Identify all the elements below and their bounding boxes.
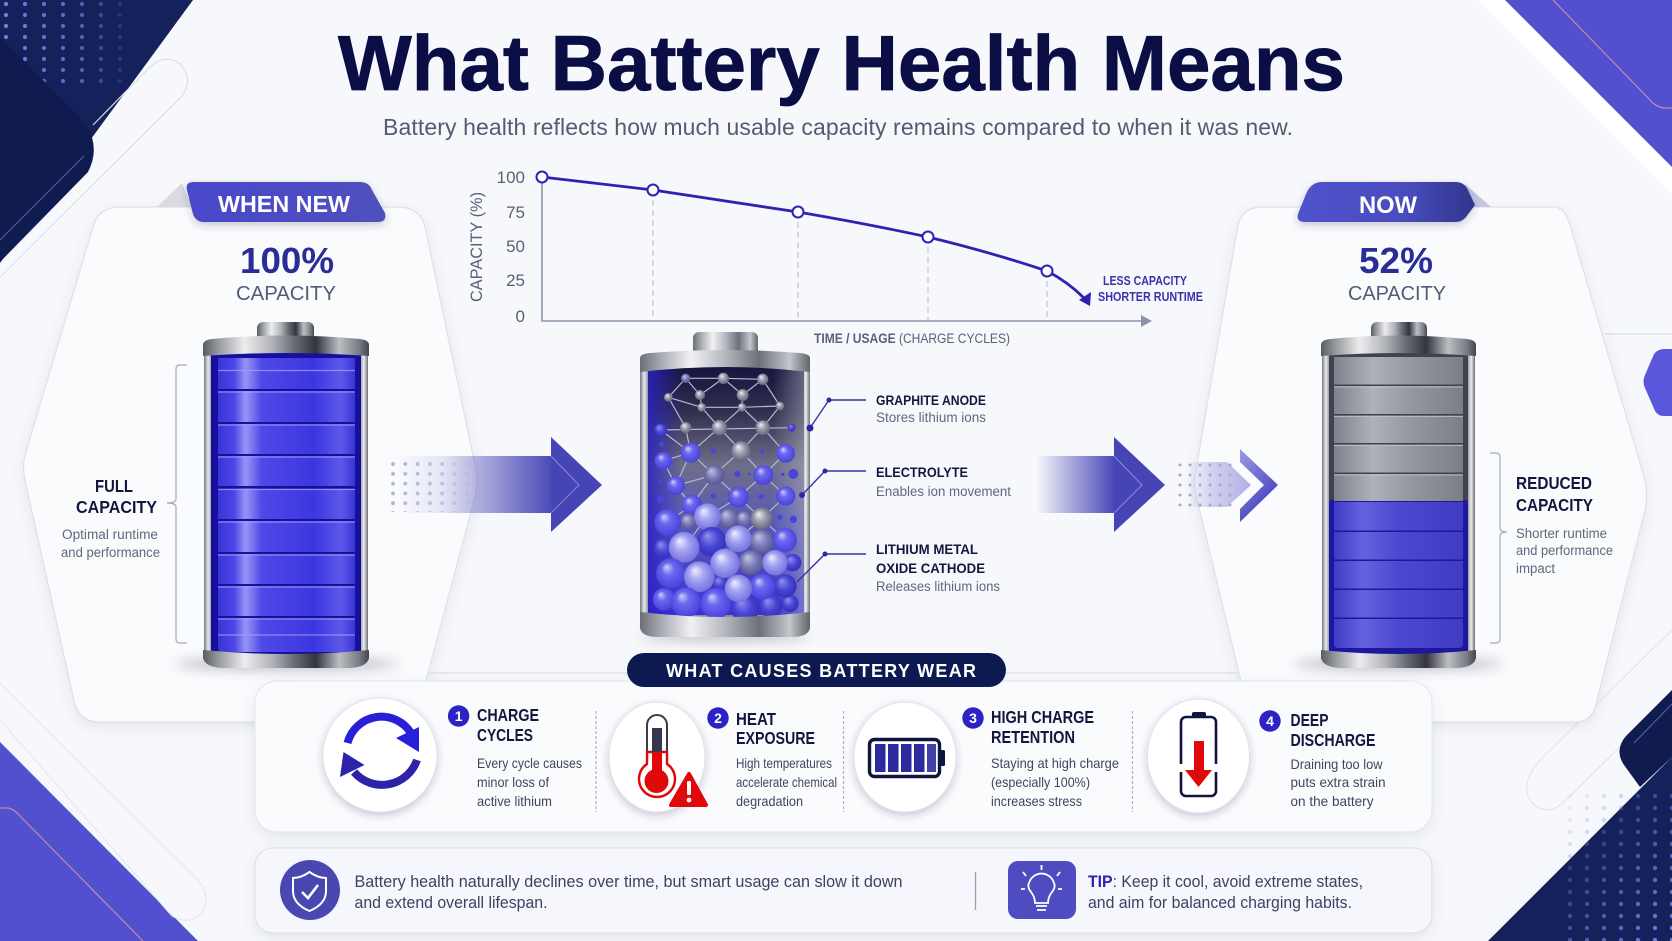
axis title: time: TIME / USAGE (CHARGE CYCLES) <box>814 331 1010 346</box>
cause 1: charge cycles <box>323 698 582 812</box>
decoration: bottom left corner <box>0 683 206 941</box>
callout: electrolyte <box>799 465 1011 499</box>
text: high charge retention: RETENTION <box>991 727 1075 747</box>
callout: graphite anode <box>806 393 986 432</box>
axis labels: y values: 25 <box>506 271 525 290</box>
chart annotation: LESS CAPACITY <box>1103 274 1188 288</box>
label: reduced capacity: REDUCED <box>1516 473 1592 493</box>
heading pill: what causes battery wear <box>627 653 1006 687</box>
label: full capacity: CAPACITY <box>76 497 157 517</box>
text: takeaway: Battery health naturally declines over time, but smart usage can slow it down <box>354 873 902 891</box>
tab: when new <box>187 182 385 222</box>
badge: 2 <box>707 707 729 729</box>
chevrons <box>1176 449 1278 522</box>
value: 100% capacity <box>236 240 336 305</box>
panel: when new <box>24 182 477 722</box>
callout: electrolyte: Enables ion movement <box>876 484 1011 499</box>
battery: full <box>174 322 398 670</box>
text: charge cycles: Every cycle causes <box>477 755 582 771</box>
value: 52% capacity <box>1348 240 1446 305</box>
badge: 4: 4 <box>1266 713 1274 729</box>
icon: full battery <box>854 702 956 812</box>
badge: 1: 1 <box>455 708 463 724</box>
icon: shield <box>280 860 340 920</box>
text: takeaway <box>354 873 902 912</box>
text: heat exposure: EXPOSURE <box>736 728 815 748</box>
text: high charge retention <box>991 707 1119 809</box>
cause 3: high charge retention <box>854 702 1119 812</box>
line chart: capacity over time <box>467 168 1203 346</box>
icon: draining battery <box>1148 699 1250 813</box>
label: full capacity: and performance <box>61 545 160 560</box>
line behind causes panel <box>428 672 1239 674</box>
label: reduced capacity: and performance <box>1516 543 1613 558</box>
text: heat exposure: accelerate chemical <box>736 774 837 790</box>
text: high charge retention: increases stress <box>991 793 1082 809</box>
text: deep discharge: puts extra strain <box>1290 774 1386 790</box>
axis labels: y values: 100 <box>497 168 525 187</box>
badge: 3: 3 <box>969 710 977 726</box>
decoration: top right corner <box>1478 0 1672 195</box>
axis title: capacity: CAPACITY (%) <box>467 192 486 302</box>
text: high charge retention: (especially 100%) <box>991 774 1090 790</box>
text: heat exposure: High temperatures <box>736 755 832 771</box>
text: heat exposure <box>736 709 837 809</box>
callout: lithium metal oxide cathode: LITHIUM METAL <box>876 542 978 557</box>
value: 52% capacity: CAPACITY <box>1348 283 1446 305</box>
heading pill: what causes battery wear: WHAT CAUSES BATTERY WEAR <box>666 661 976 681</box>
text: tip: TIP: Keep it cool, avoid extreme states, <box>1088 873 1363 891</box>
panel: now <box>1194 182 1646 722</box>
capacity curve <box>536 172 1091 306</box>
callout: electrolyte: ELECTROLYTE <box>876 465 968 480</box>
arrow: new to internals <box>388 437 602 532</box>
label: full capacity: Optimal runtime <box>62 527 158 542</box>
battery interior <box>648 365 804 622</box>
text: deep discharge <box>1290 710 1386 809</box>
label: full capacity: FULL <box>95 476 133 496</box>
chart annotation: SHORTER RUNTIME <box>1098 290 1203 304</box>
chart annotation <box>1098 274 1203 304</box>
axis labels: y values: 0 <box>516 307 525 326</box>
text: deep discharge: Draining too low <box>1290 756 1383 772</box>
callout: graphite anode: Stores lithium ions <box>876 410 986 425</box>
cause 4: deep discharge <box>1148 699 1386 813</box>
text: heat exposure: degradation <box>736 793 803 809</box>
callout: lithium metal oxide cathode: Releases lithium ions <box>876 579 1000 594</box>
text: tip <box>1088 873 1363 912</box>
subtitle: Battery health reflects how much usable capacity remains compared to when it was new. <box>383 114 1293 140</box>
text: deep discharge: DEEP <box>1290 710 1329 730</box>
badge: 3 <box>962 707 984 729</box>
bracket: full capacity <box>167 365 187 643</box>
badge: 2: 2 <box>714 710 722 726</box>
text: takeaway: and extend overall lifespan. <box>354 894 548 912</box>
icon: lightbulb <box>1008 861 1076 919</box>
icon: cycle arrows <box>323 698 437 812</box>
text: deep discharge: DISCHARGE <box>1290 730 1376 750</box>
text: high charge retention: HIGH CHARGE <box>991 707 1094 727</box>
icon: thermometer <box>609 702 706 812</box>
text: charge cycles <box>477 705 582 809</box>
text: high charge retention: Staying at high charge <box>991 755 1119 771</box>
label: reduced capacity: CAPACITY <box>1516 495 1593 515</box>
arrow: internals to now <box>1036 437 1165 532</box>
label: full capacity <box>61 476 160 560</box>
axis labels: y values: 50 <box>506 237 525 256</box>
tab: now <box>1298 182 1475 222</box>
value: 52% capacity: 52% <box>1359 240 1433 281</box>
text: charge cycles: CYCLES <box>477 725 533 745</box>
callout: lithium metal oxide cathode <box>797 542 1000 594</box>
value: 100% capacity: 100% <box>240 240 334 281</box>
badge: 1 <box>448 705 469 727</box>
axis labels: y values: 75 <box>506 203 525 222</box>
text: deep discharge: on the battery <box>1290 793 1374 809</box>
panel: what causes battery wear <box>255 681 1432 832</box>
text: charge cycles: minor loss of <box>477 774 549 790</box>
bracket: reduced capacity <box>1490 453 1507 643</box>
tab: now: NOW <box>1359 192 1417 219</box>
text: charge cycles: CHARGE <box>477 705 539 725</box>
text: charge cycles: active lithium <box>477 793 552 809</box>
label: reduced capacity: Shorter runtime <box>1516 526 1607 541</box>
badge: 4 <box>1259 710 1281 732</box>
title: What Battery Health Means <box>338 19 1345 107</box>
cause 2: heat exposure <box>609 702 837 812</box>
label: reduced capacity: impact <box>1516 561 1555 576</box>
decoration: bottom right corner <box>1488 630 1672 941</box>
tab fold <box>1465 184 1491 207</box>
label: reduced capacity <box>1516 473 1613 576</box>
text: heat exposure: HEAT <box>736 709 776 729</box>
callout: lithium metal oxide cathode: OXIDE CATHODE <box>876 561 985 576</box>
battery: partial <box>1294 322 1502 670</box>
text: tip: and aim for balanced charging habits. <box>1088 894 1352 912</box>
battery cross-section <box>640 332 810 641</box>
tab fold <box>157 183 192 207</box>
callout: graphite anode: GRAPHITE ANODE <box>876 393 986 408</box>
panel: takeaway and tip <box>255 848 1432 933</box>
value: 100% capacity: CAPACITY <box>236 283 336 305</box>
axes <box>542 180 1152 327</box>
decoration: right edge hexagon <box>1605 334 1672 416</box>
tab: when new: WHEN NEW <box>218 191 350 217</box>
decoration: top left corner <box>0 0 193 277</box>
axis labels: y values <box>497 168 525 326</box>
